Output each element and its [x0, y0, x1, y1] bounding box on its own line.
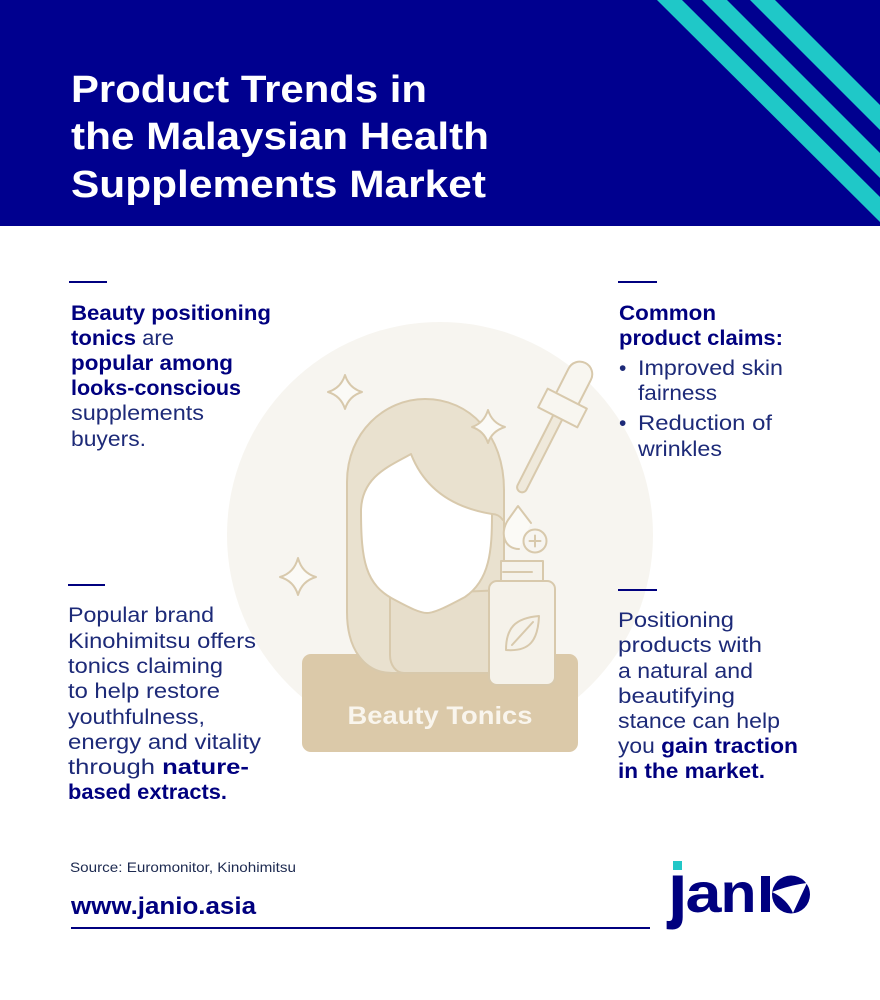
- text block: common product claims: [618, 281, 783, 461]
- label plate: Beauty Tonics: [348, 702, 532, 730]
- janio logo: j: [666, 836, 688, 931]
- text block: beauty positioning tonics: popular among: [71, 352, 233, 375]
- text block: common product claims: Common: [619, 302, 716, 325]
- text block: beauty positioning tonics: tonics are: [71, 327, 174, 350]
- label plate: [302, 654, 578, 752]
- title: Supplements Market: [71, 164, 486, 206]
- text block: common product claims: wrinkles: [637, 438, 722, 461]
- text block: positioning advice: products with: [618, 634, 762, 657]
- background circle: [227, 322, 653, 748]
- text block: positioning advice: beautifying: [618, 685, 735, 708]
- text block: common product claims: Reduction of: [638, 412, 772, 435]
- text block: positioning advice: [618, 589, 798, 783]
- text block: Kinohimitsu: to help restore: [68, 680, 220, 703]
- text block: Kinohimitsu: through nature-: [68, 756, 249, 779]
- source note: Source: Euromonitor, Kinohimitsu: [70, 859, 296, 875]
- janio logo: n: [720, 861, 756, 924]
- text block: common product claims: fairness: [638, 382, 717, 405]
- illustration: beauty tonics: [227, 322, 653, 752]
- janio logo: [655, 836, 810, 931]
- icon: woman with long hair: [347, 399, 504, 673]
- text block: positioning advice: in the market.: [618, 760, 765, 783]
- diagonal teal stripes: [657, 0, 880, 222]
- text block: Kinohimitsu: based extracts.: [68, 781, 227, 804]
- text block: positioning advice: Positioning: [618, 609, 734, 632]
- header banner: [0, 0, 880, 226]
- text block: positioning advice: a natural and: [618, 660, 753, 683]
- icon: drop with plus: [504, 506, 546, 552]
- logo o mark: [772, 876, 810, 914]
- text block: positioning advice: you gain traction: [618, 735, 798, 758]
- text block: beauty positioning tonics: supplements: [71, 402, 204, 425]
- text block: positioning advice: stance can help: [618, 710, 780, 733]
- text block: beauty positioning tonics: looks-conscious: [71, 377, 241, 400]
- icon: bottle with leaf: [489, 561, 555, 685]
- text block: common product claims: product claims:: [619, 327, 783, 350]
- text block: Kinohimitsu: Popular brand: [68, 604, 214, 627]
- icon: dropper: [500, 353, 605, 502]
- text block: beauty positioning tonics: Beauty positioning: [71, 302, 271, 325]
- footer rule: [71, 927, 650, 929]
- text block: Kinohimitsu: youthfulness,: [68, 706, 205, 729]
- text block: Kinohimitsu: Kinohimitsu offers: [68, 630, 256, 653]
- website url: www.janio.asia: [70, 893, 257, 920]
- text block: common product claims: •: [619, 357, 626, 380]
- text block: common product claims: Improved skin: [638, 357, 783, 380]
- title: Product Trends in: [71, 69, 427, 111]
- text block: beauty positioning tonics: buyers.: [71, 428, 146, 451]
- janio logo: a: [686, 861, 722, 924]
- text block: Kinohimitsu: energy and vitality: [68, 731, 262, 754]
- icon: sparkles: [280, 375, 505, 595]
- text block: common product claims: •: [619, 412, 626, 435]
- text block: Kinohimitsu: [68, 584, 262, 804]
- title: [71, 69, 489, 206]
- text block: Kinohimitsu: tonics claiming: [68, 655, 223, 678]
- title: the Malaysian Health: [71, 116, 489, 158]
- text block: beauty positioning tonics: [69, 281, 271, 451]
